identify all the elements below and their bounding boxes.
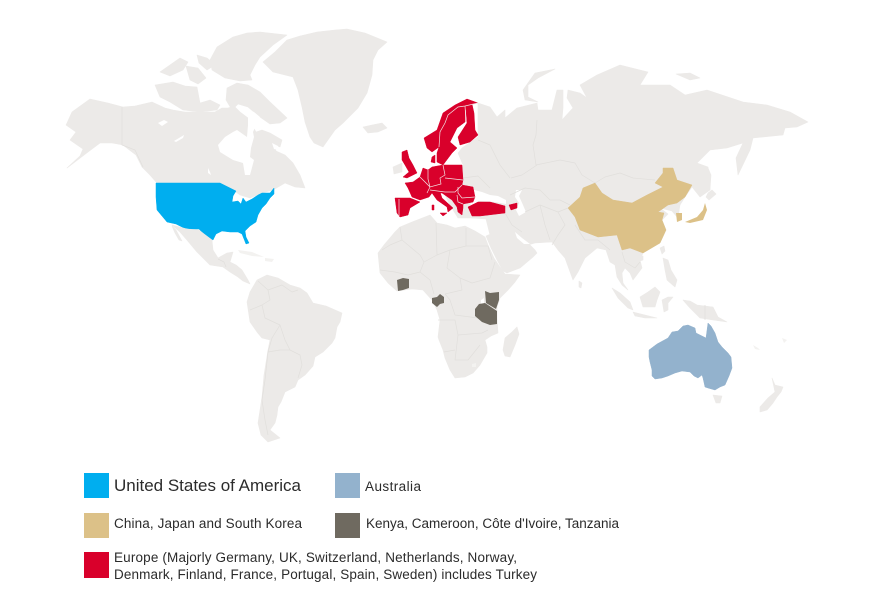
country: Australia (649, 323, 732, 390)
country: Cameroon (432, 294, 444, 307)
legend (84, 473, 619, 582)
country: United States (156, 183, 274, 244)
legend item: United States of America (84, 473, 302, 498)
countries: central Europe and France (405, 165, 475, 215)
region: China (568, 168, 692, 253)
landmass: Mexico and Central America (172, 225, 274, 284)
country: United Kingdom (402, 150, 417, 178)
landmass: Eurasia (445, 65, 808, 290)
legend item: China, Japan and South Korea: China, Japan and South Korea (114, 516, 302, 531)
legend item: Australia (335, 473, 421, 498)
country: South Korea (676, 213, 682, 222)
legend item: Kenya, Cameroon, Cote d'Ivoire, Tanzania (335, 513, 619, 538)
country: Turkey (468, 202, 505, 216)
legend item: Europe: Europe (Majorly Germany, UK, Switzerland, Netherlands, Norway, (114, 550, 517, 565)
country: Cote d'Ivoire (397, 278, 409, 291)
water: Black Sea, Caspian Sea, Persian Gulf (470, 190, 530, 244)
landmass: North America (Canada, Alaska, Greenland) (66, 29, 387, 198)
water: Hudson Bay (218, 110, 260, 175)
landmass: Africa (378, 215, 520, 378)
country: Azerbaijan (509, 203, 517, 210)
world map (66, 29, 808, 442)
country: Denmark (431, 155, 435, 163)
country: Sweden (437, 106, 465, 165)
legend item: China, Japan and South Korea (84, 513, 302, 538)
legend item: United States of America: United States of America (114, 476, 302, 495)
countries: Africa highlights (397, 278, 499, 325)
landmass: Southeast Asia and Oceania (363, 123, 787, 412)
country: Spain and Portugal (395, 198, 420, 217)
country: Norway (424, 99, 478, 152)
legend item: Australia: Australia (365, 479, 421, 494)
country: Finland (458, 104, 478, 145)
legend item: Europe: Denmark, Finland, France, Portugal, Spain, Sweden) includes Turkey (114, 567, 537, 582)
country: Tanzania (475, 303, 497, 325)
legend item: Kenya, Cameroon, Cote d'Ivoire, Tanzania: Kenya, Cameroon, Côte d'Ivoire, Tanzania (366, 516, 619, 531)
country: Kenya (485, 291, 499, 309)
legend item: Europe (84, 550, 537, 582)
country: Italy (432, 192, 453, 212)
region: Europe (395, 99, 517, 217)
country: Japan (685, 203, 707, 223)
landmass: South America (247, 275, 342, 442)
